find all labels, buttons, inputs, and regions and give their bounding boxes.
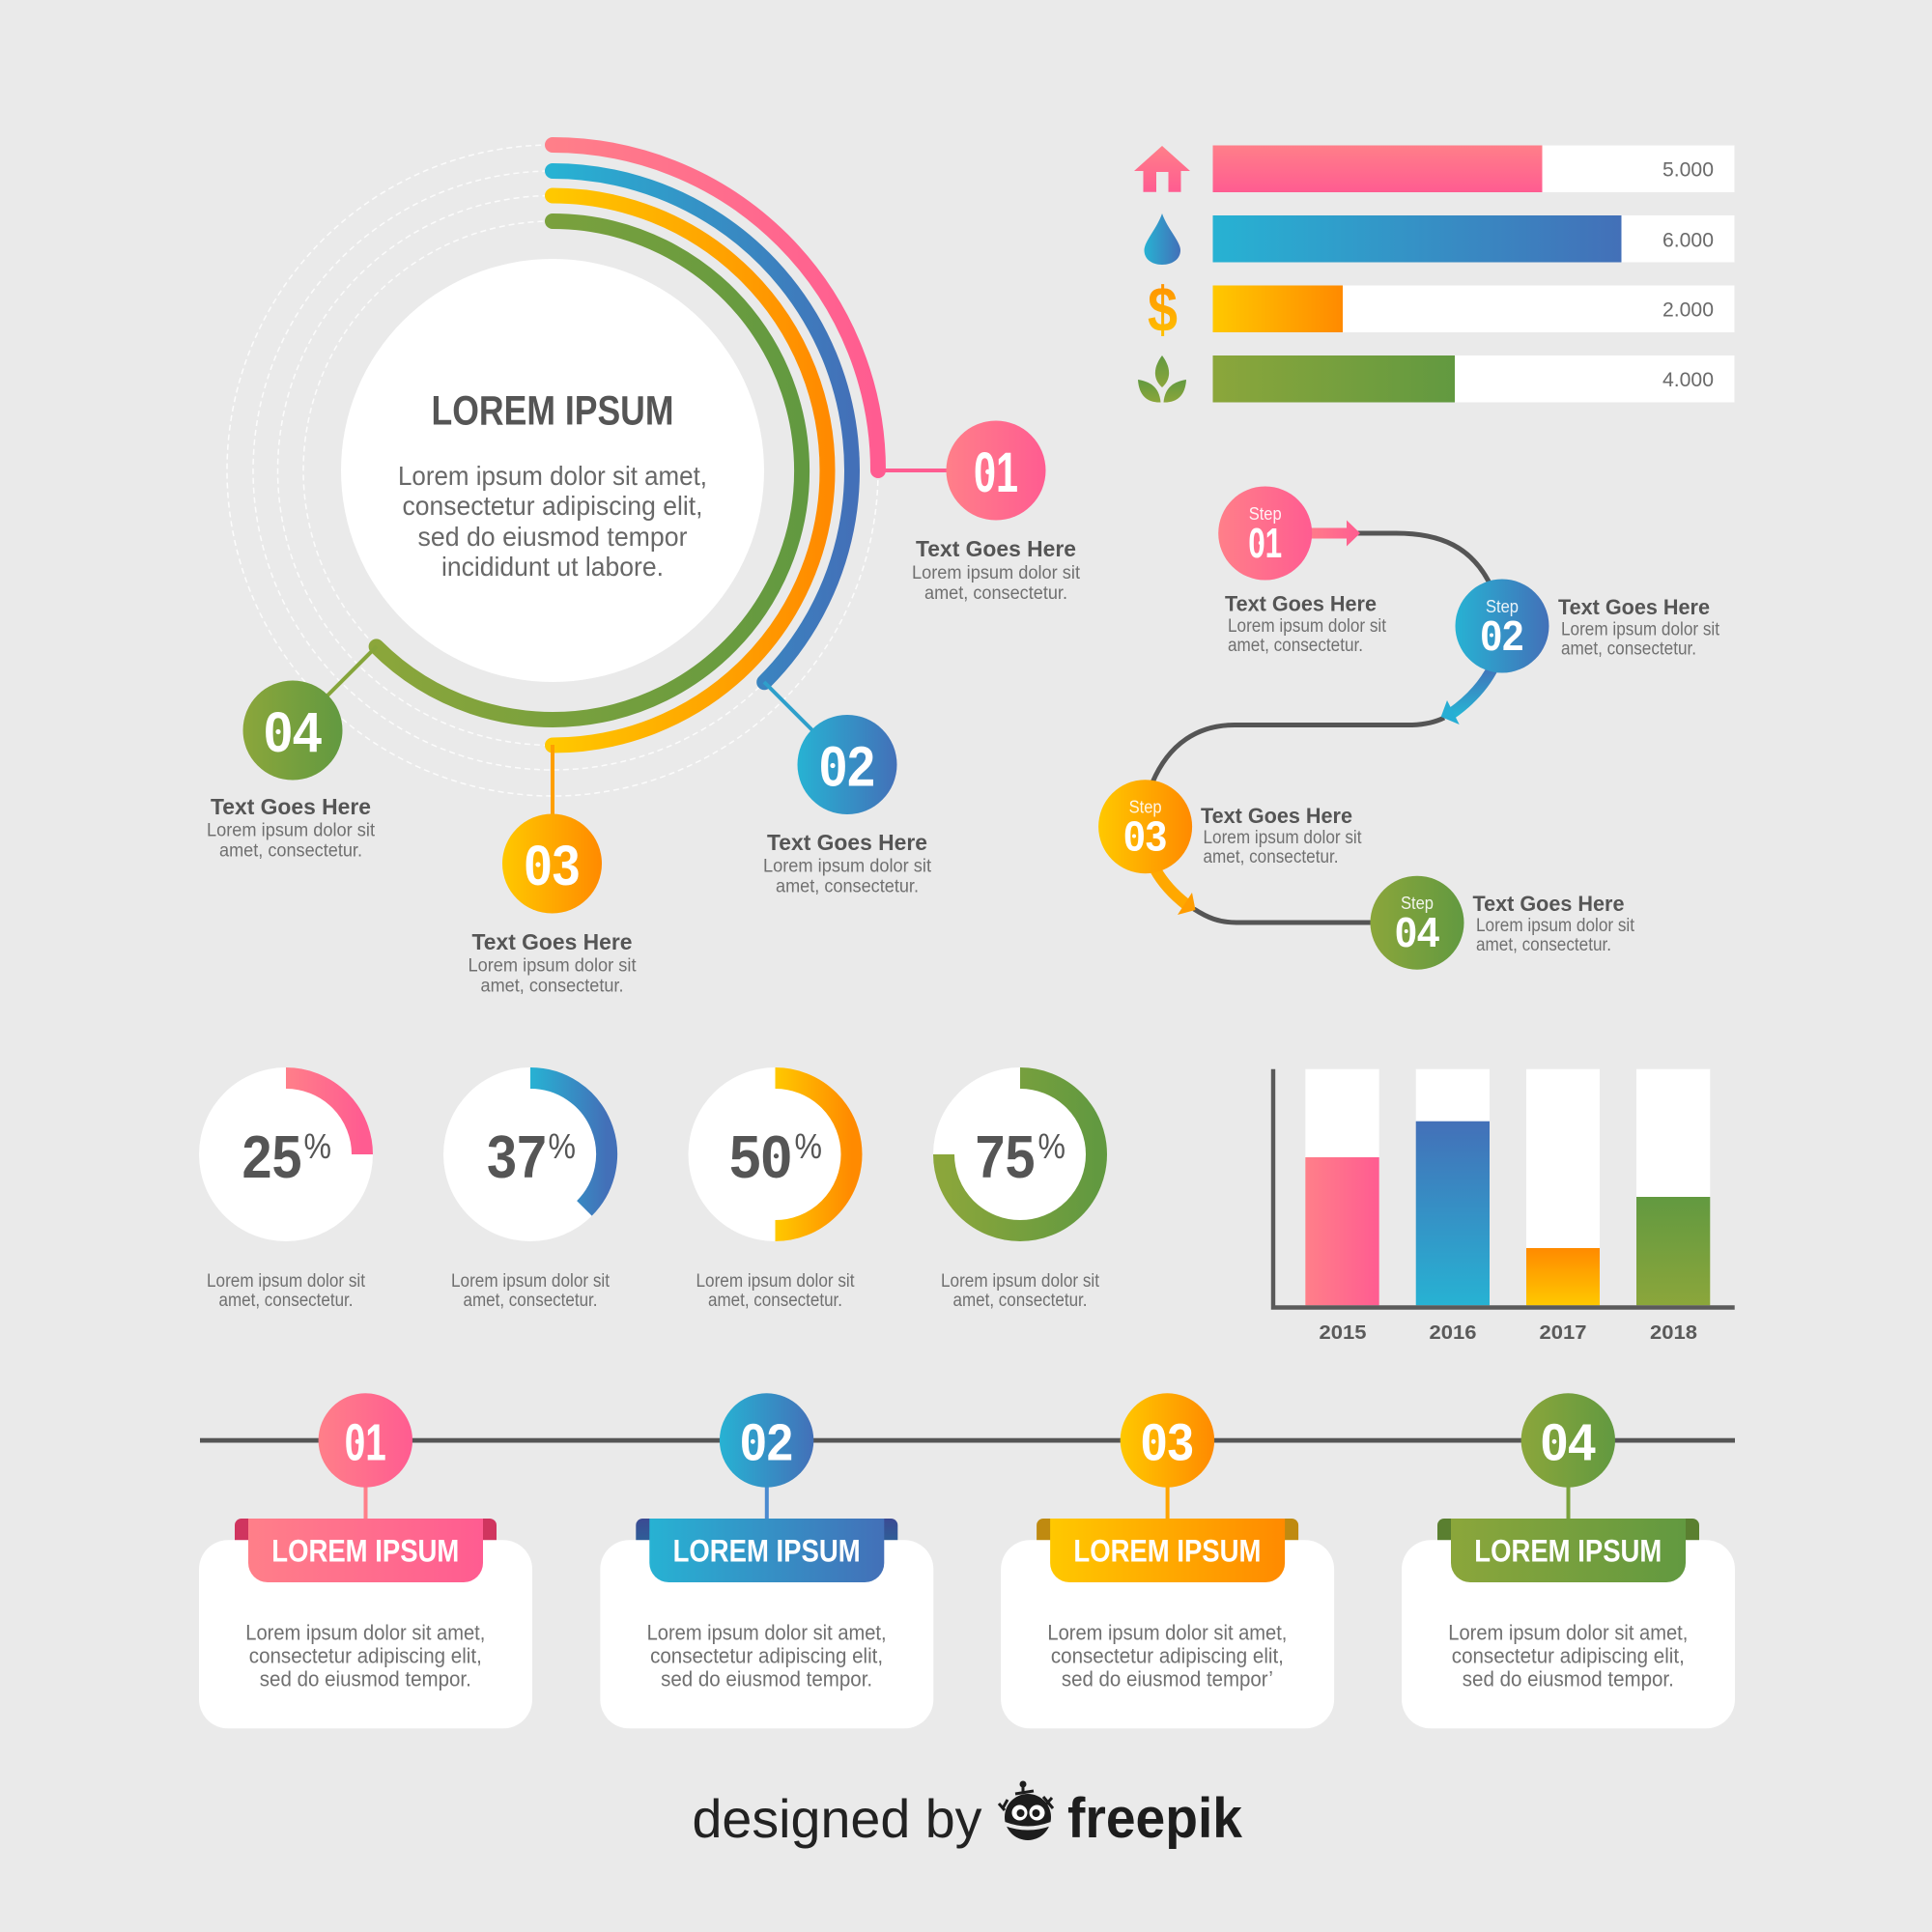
donut 75% <box>933 1067 1107 1311</box>
icon: dollar: $ <box>1148 273 1178 345</box>
timeline item 03 <box>1001 1393 1334 1728</box>
panel: horizontal bar chart <box>1134 145 1735 403</box>
timeline line <box>200 1438 1735 1443</box>
arc 04 green <box>377 221 802 720</box>
callout 01: Lorem ipsum dolor sit <box>912 563 1081 583</box>
step 03: amet, consectetur. <box>1204 847 1339 867</box>
step 04: Lorem ipsum dolor sit <box>1476 916 1635 936</box>
step 03 <box>1098 780 1362 873</box>
callout 02: Lorem ipsum dolor sit <box>763 856 932 877</box>
footer credit <box>692 1781 1243 1850</box>
center paragraph: consectetur adipiscing elit, <box>402 491 703 521</box>
donut 50%: Lorem ipsum dolor sit <box>696 1271 855 1292</box>
timeline item 04: 04 <box>1541 1414 1596 1472</box>
bar row 4.000 <box>1213 355 1735 402</box>
arc 01 pink <box>553 145 878 470</box>
timeline item 03: consectetur adipiscing elit, <box>1051 1644 1284 1668</box>
timeline item 01: 01 <box>345 1414 386 1472</box>
callout 02: Text Goes Here <box>767 830 927 855</box>
center heading: LOREM IPSUM <box>431 388 674 435</box>
callout 03: Text Goes Here <box>471 929 632 954</box>
center paragraph <box>398 461 707 582</box>
timeline item 04 <box>1402 1393 1735 1728</box>
arc 03 orange <box>553 195 827 746</box>
column 2015: 2015 <box>1320 1322 1366 1344</box>
step 02: Lorem ipsum dolor sit <box>1561 620 1720 639</box>
bar row 5.000 <box>1213 145 1735 192</box>
donut 25%: Lorem ipsum dolor sit <box>207 1271 366 1292</box>
panel: radial arc diagram <box>207 145 1081 997</box>
step 02 <box>1455 580 1720 672</box>
icon: house <box>1134 146 1190 192</box>
column 2018 <box>1636 1069 1710 1344</box>
callout 01: 01 <box>974 441 1018 504</box>
callout 01: Text Goes Here <box>916 536 1076 561</box>
callout 02: amet, consectetur. <box>776 877 919 896</box>
timeline item 04: consectetur adipiscing elit, <box>1452 1644 1685 1668</box>
bar row 6.000 <box>1213 215 1735 263</box>
donut 37%: 37 <box>487 1124 547 1191</box>
icon: freepik logo <box>999 1781 1053 1840</box>
step 02: amet, consectetur. <box>1561 639 1696 659</box>
donut 75%: Lorem ipsum dolor sit <box>941 1271 1100 1292</box>
arrow 2 <box>1441 667 1493 724</box>
designed by text: designed by <box>692 1788 981 1849</box>
timeline item 04: LOREM IPSUM <box>1474 1534 1662 1569</box>
panel: step flow <box>1098 487 1720 970</box>
step 01: Text Goes Here <box>1225 591 1377 616</box>
center paragraph: sed do eiusmod tempor <box>417 522 688 552</box>
timeline item 01: Lorem ipsum dolor sit amet, <box>245 1620 485 1644</box>
step 02: 02 <box>1480 612 1524 660</box>
icon: leaves <box>1138 355 1186 403</box>
center paragraph: incididunt ut labore. <box>441 552 664 582</box>
donut 25%: % <box>303 1126 331 1166</box>
donut 75%: % <box>1037 1126 1065 1166</box>
donut 37%: Lorem ipsum dolor sit <box>451 1271 611 1292</box>
donut 50%: % <box>794 1126 822 1166</box>
center circle with text <box>341 259 764 682</box>
timeline item 02: 02 <box>740 1414 793 1472</box>
callout 02 <box>763 682 932 896</box>
bar row 2.000 <box>1213 286 1735 332</box>
timeline item 02 <box>600 1393 933 1728</box>
column 2016 <box>1416 1069 1490 1344</box>
step 01: Lorem ipsum dolor sit <box>1228 616 1387 637</box>
callout 02: 02 <box>819 736 875 798</box>
center paragraph: Lorem ipsum dolor sit amet, <box>398 461 707 491</box>
column 2018: 2018 <box>1650 1322 1697 1344</box>
timeline item 03: 03 <box>1141 1414 1194 1472</box>
step 04 <box>1370 876 1635 970</box>
bar row 4.000: 4.000 <box>1662 368 1714 391</box>
callout 03: 03 <box>524 835 580 897</box>
dashed guide rings <box>227 145 878 796</box>
callout 01: amet, consectetur. <box>924 583 1067 604</box>
callout 04 <box>207 646 377 862</box>
timeline item 01: sed do eiusmod tempor. <box>260 1667 471 1691</box>
step 04: 04 <box>1395 909 1439 956</box>
column 2017 <box>1526 1069 1600 1344</box>
step 01: 01 <box>1248 520 1282 567</box>
connector path <box>1152 533 1492 923</box>
donut 75%: amet, consectetur. <box>952 1291 1088 1311</box>
timeline item 03: LOREM IPSUM <box>1073 1534 1261 1569</box>
donut 50%: 50 <box>729 1124 792 1191</box>
arrow 3 <box>1155 869 1196 915</box>
timeline item 01: LOREM IPSUM <box>271 1534 459 1569</box>
callout 04: amet, consectetur. <box>219 840 362 862</box>
panel: timeline <box>199 1393 1735 1728</box>
donut 25% <box>199 1067 373 1311</box>
timeline item 03: sed do eiusmod tempor’ <box>1062 1667 1273 1691</box>
donut 50%: amet, consectetur. <box>708 1291 842 1311</box>
chart axes <box>1273 1069 1735 1308</box>
arrow 1 <box>1304 520 1360 547</box>
step 01 <box>1218 487 1387 656</box>
callout 04: Lorem ipsum dolor sit <box>207 821 376 840</box>
callout 03 <box>468 745 637 997</box>
bar row 6.000: 6.000 <box>1662 228 1714 251</box>
donut 25%: 25 <box>242 1124 301 1191</box>
donut 50% <box>688 1067 862 1311</box>
step 03: Lorem ipsum dolor sit <box>1204 828 1362 848</box>
donut 37%: amet, consectetur. <box>464 1291 597 1311</box>
bar row 2.000: 2.000 <box>1662 298 1714 322</box>
timeline item 02: sed do eiusmod tempor. <box>661 1667 872 1691</box>
step 03: 03 <box>1123 813 1167 861</box>
panel: column chart <box>1273 1069 1735 1344</box>
donut 75%: 75 <box>976 1124 1036 1191</box>
column 2016: 2016 <box>1430 1322 1476 1344</box>
step 01: amet, consectetur. <box>1228 636 1363 656</box>
timeline item 01: consectetur adipiscing elit, <box>249 1644 482 1668</box>
timeline item 01 <box>199 1393 532 1728</box>
donut 37% <box>443 1067 617 1311</box>
column 2015 <box>1305 1069 1379 1344</box>
column 2017: 2017 <box>1540 1322 1586 1344</box>
step 02: Text Goes Here <box>1558 595 1710 619</box>
donut 37%: % <box>549 1126 576 1166</box>
callout 01 <box>878 421 1081 604</box>
bar row 5.000: 5.000 <box>1662 158 1714 182</box>
callout 03: Lorem ipsum dolor sit <box>468 956 637 976</box>
step 03: Text Goes Here <box>1201 804 1352 828</box>
timeline item 02: Lorem ipsum dolor sit amet, <box>647 1620 887 1644</box>
timeline item 02: consectetur adipiscing elit, <box>650 1644 883 1668</box>
donut 25%: amet, consectetur. <box>218 1291 354 1311</box>
callout 04: Text Goes Here <box>211 794 371 819</box>
timeline item 04: sed do eiusmod tempor. <box>1463 1667 1674 1691</box>
step 04: Step <box>1401 894 1434 913</box>
freepik wordmark: freepik <box>1067 1787 1243 1850</box>
step 04: amet, consectetur. <box>1476 935 1611 955</box>
timeline item 03: Lorem ipsum dolor sit amet, <box>1047 1620 1287 1644</box>
step 02: Step <box>1486 597 1519 616</box>
step 04: Text Goes Here <box>1472 892 1625 916</box>
icon: water drop <box>1144 213 1180 265</box>
panel: percentage donuts <box>199 1067 1107 1311</box>
timeline item 02: LOREM IPSUM <box>673 1534 861 1569</box>
step 03: Step <box>1129 798 1162 817</box>
timeline item 04: Lorem ipsum dolor sit amet, <box>1448 1620 1688 1644</box>
arc 02 blue <box>553 171 852 682</box>
callout 03: amet, consectetur. <box>481 976 624 997</box>
callout 04: 04 <box>264 701 322 764</box>
step 01: Step <box>1249 504 1282 524</box>
